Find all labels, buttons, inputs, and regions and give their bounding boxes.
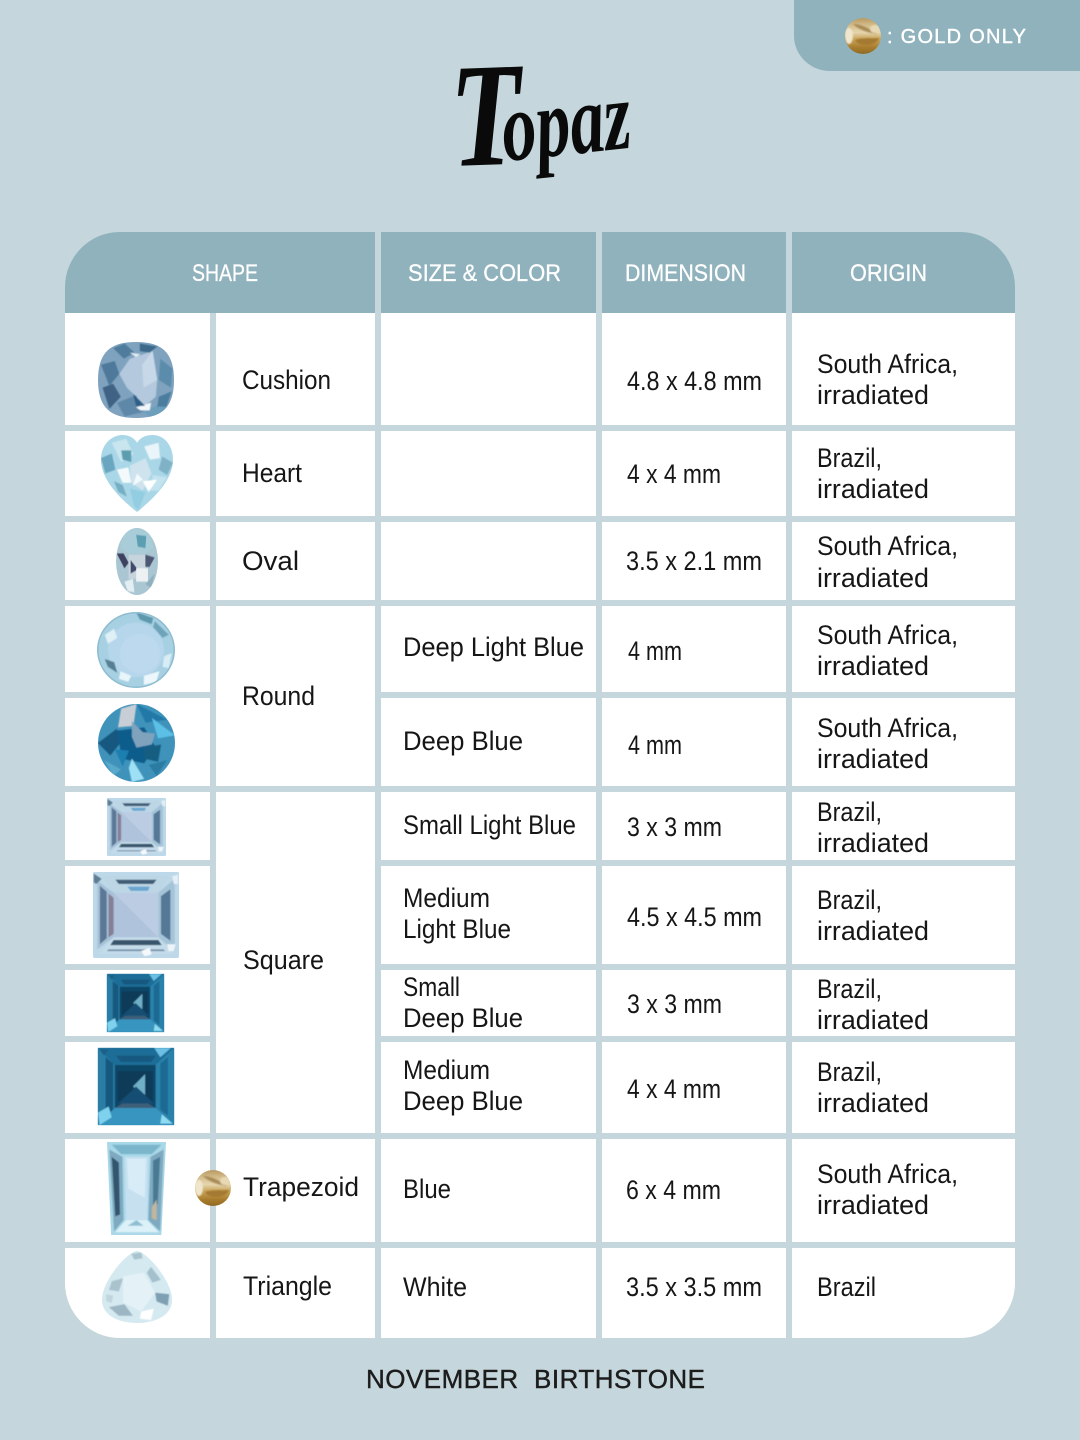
- icon: cushion gem: [98, 342, 174, 418]
- header labels: [192, 260, 927, 287]
- row: square medium light blue: [93, 872, 929, 958]
- dimension: 4.8 x 4.8 mm: [627, 366, 762, 396]
- size and color: Medium: [403, 883, 490, 913]
- row: round light blue: [97, 612, 958, 711]
- shape name: Oval: [242, 546, 299, 576]
- size and color: Small Light Blue: [403, 810, 576, 840]
- origin: [817, 620, 958, 681]
- icon: heart gem: [101, 435, 173, 512]
- origin: irradiated: [817, 828, 929, 858]
- icon: round light gem: [97, 612, 175, 688]
- shape name: Heart: [242, 458, 302, 488]
- origin: South Africa,: [817, 349, 958, 379]
- title: opaz: [496, 61, 636, 183]
- title: [447, 32, 636, 198]
- origin: Brazil,: [817, 974, 882, 1004]
- origin: [817, 1057, 929, 1118]
- icon: gold only marker: [195, 1170, 231, 1206]
- shape name: Cushion: [242, 365, 331, 395]
- origin: [817, 531, 958, 593]
- shape name: round, spans two rows: Round: [242, 681, 315, 711]
- origin: Brazil,: [817, 1057, 882, 1087]
- dimension: 3.5 x 2.1 mm: [626, 546, 762, 576]
- size and color: [403, 972, 523, 1033]
- icon: medium light square gem: [93, 872, 179, 958]
- origin: South Africa,: [817, 1159, 958, 1189]
- origin: Brazil,: [817, 797, 882, 827]
- origin: irradiated: [817, 1005, 929, 1035]
- origin: [817, 885, 929, 946]
- row: square medium deep blue: [98, 1048, 929, 1125]
- origin: [817, 443, 929, 504]
- size and color: Blue: [403, 1174, 451, 1204]
- row: square small deep blue: [107, 972, 929, 1035]
- row: cushion: [98, 342, 958, 418]
- row: trapezoid: [107, 1142, 958, 1235]
- icon: medium deep square gem: [98, 1048, 174, 1125]
- origin: [817, 974, 929, 1035]
- footer caption: NOVEMBER BIRTHSTONE: [366, 1364, 705, 1394]
- origin: [817, 1159, 958, 1220]
- origin: Brazil: [817, 1272, 876, 1302]
- shape name: Trapezoid: [243, 1172, 359, 1202]
- dimension: 4.5 x 4.5 mm: [627, 902, 762, 932]
- icon: oval gem: [116, 528, 158, 595]
- origin: [817, 713, 958, 774]
- size and color: Light Blue: [403, 914, 511, 944]
- shape name: square, spans four rows: Square: [243, 945, 324, 975]
- icon: trapezoid gem: [107, 1142, 166, 1235]
- shape name: Triangle: [243, 1271, 332, 1301]
- size and color: White: [403, 1272, 467, 1302]
- origin: South Africa,: [817, 620, 958, 650]
- image column cells: [65, 313, 210, 1338]
- dimension: 3.5 x 3.5 mm: [626, 1272, 762, 1302]
- size and color: [403, 883, 511, 944]
- size and color: Deep Light Blue: [403, 632, 584, 662]
- origin: irradiated: [817, 563, 929, 593]
- row: round deep blue: [98, 704, 958, 782]
- size and color: Small: [403, 972, 460, 1002]
- row: heart: [101, 435, 929, 512]
- origin: South Africa,: [817, 531, 958, 561]
- row: square small light blue: [107, 797, 929, 975]
- origin: irradiated: [817, 744, 929, 774]
- header: origin: ORIGIN: [850, 260, 927, 287]
- dimension: 4 x 4 mm: [627, 459, 721, 489]
- gold only legend tab: [794, 0, 1080, 71]
- size, dimension and origin cells: [381, 313, 1015, 1338]
- origin: [817, 349, 958, 410]
- size and color: Deep Blue: [403, 1086, 523, 1116]
- header: dimension: DIMENSION: [625, 260, 746, 287]
- origin: irradiated: [817, 651, 929, 681]
- legend text: : GOLD ONLY: [887, 26, 1026, 48]
- size and color: [403, 1055, 523, 1116]
- dimension: 4 x 4 mm: [627, 1074, 721, 1104]
- table: [65, 232, 1015, 1338]
- header: shape: SHAPE: [192, 260, 258, 287]
- size and color: Medium: [403, 1055, 490, 1085]
- origin: irradiated: [817, 916, 929, 946]
- icon: triangle gem: [102, 1251, 172, 1323]
- origin: irradiated: [817, 380, 929, 410]
- icon: round deep blue gem: [98, 704, 175, 782]
- dimension: 4 mm: [628, 730, 682, 760]
- origin: [817, 797, 929, 858]
- title: T: [447, 32, 528, 198]
- origin: irradiated: [817, 474, 929, 504]
- header: size and color: SIZE & COLOR: [408, 260, 561, 287]
- dimension: 6 x 4 mm: [626, 1175, 721, 1205]
- icon: small light square gem: [107, 798, 166, 856]
- size and color: Deep Blue: [403, 1003, 523, 1033]
- dimension: 4 mm: [628, 636, 682, 666]
- icon: small deep square gem: [107, 974, 164, 1032]
- icon: gold coin: [845, 18, 881, 54]
- origin: irradiated: [817, 1190, 929, 1220]
- origin: Brazil,: [817, 443, 882, 473]
- shape name cells: [216, 313, 375, 1338]
- size and color: Deep Blue: [403, 726, 523, 756]
- origin: irradiated: [817, 1088, 929, 1118]
- origin: South Africa,: [817, 713, 958, 743]
- row: triangle: [102, 1251, 876, 1323]
- table cells and header background: [65, 232, 1015, 1338]
- dimension: 3 x 3 mm: [627, 989, 722, 1019]
- dimension: 3 x 3 mm: [627, 812, 722, 842]
- header band: [65, 232, 1015, 313]
- row: oval: [116, 528, 958, 595]
- origin: Brazil,: [817, 885, 882, 915]
